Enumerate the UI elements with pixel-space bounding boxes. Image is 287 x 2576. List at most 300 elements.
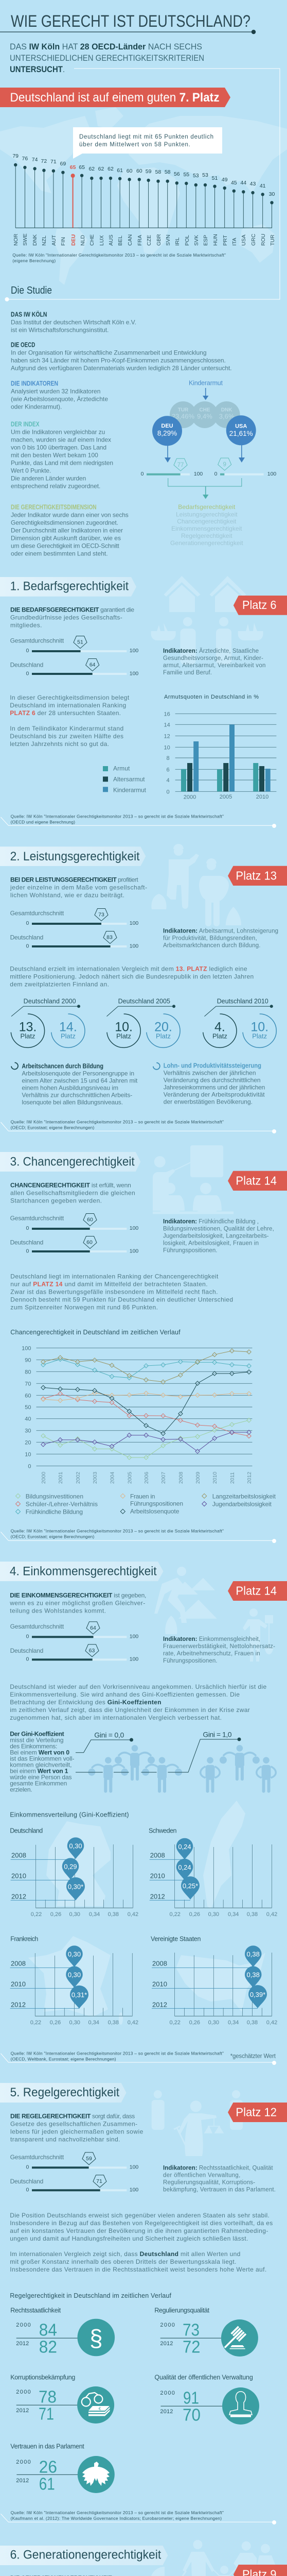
text: Gini explanation: würde eine Person das [9, 1773, 72, 1781]
section heading: 4. Einkommensgerechtigkeit [10, 1564, 157, 1578]
body text [10, 694, 130, 748]
chart: Deutschland: 0,30 [69, 1911, 80, 1918]
body text: Deutschland bis zur zweiten Hälfte des [10, 733, 123, 740]
definition: lichen Wohlstand, wie er dazu beiträgt. [10, 892, 124, 899]
diagram: index method: 8,29% [157, 429, 177, 437]
lollipop chart: overall ranking: 51 [212, 175, 218, 181]
score gauges: Deutschland [10, 934, 43, 941]
stat: Korruptionsbekaempfung [10, 2374, 114, 2424]
stat: Qualitaet der oeffentlichen Verwaltung: 2000 [160, 2390, 175, 2396]
score gauges: 100 [130, 1633, 138, 1639]
indicators: der öffentlichen Verwaltung, [163, 2173, 240, 2179]
chart: Schweden: Schweden [149, 1827, 176, 1834]
indicators: Indikatoren: Rechtsstaatlichkeit, Qualität [163, 2165, 273, 2172]
diagram: index method: Regelgerechtigkeit [181, 532, 232, 539]
body text: Insbesondere in Bezug auf das Bestehen von Regelgerechtigkeit ist dies vorteilhaft, da es [10, 2219, 273, 2227]
text: study description: Dimension gibt Auskunft darüber, wie es [11, 535, 121, 542]
intro text: DAS IW Köln HAT 28 OECD-Länder NACH SECHS [10, 42, 202, 52]
chart: Schweden: 0,38 [247, 1911, 258, 1918]
diagram: index method: TUR [178, 408, 189, 413]
text: study description: Die anderen Länder wurden [11, 475, 86, 482]
stat: Regulierungsqualitaet: 72 [183, 2337, 201, 2357]
text: Gini explanation: ist das Einkommen voll- [10, 1755, 75, 1762]
lollipop chart: overall ranking: 58 [155, 169, 161, 175]
legend: Lohn- und Produktivitaetssteigerung: der erwerbstätigen Bevölkerung. [164, 1098, 253, 1106]
ring chart: rankings 2000: Platz [21, 1032, 35, 1040]
stat: Rechtsstaatlichkeit: 82 [39, 2337, 57, 2357]
text: study description: Gerechtigkeitsdimensionen zugeordnet. [11, 519, 118, 527]
text: study description: DER INDEX [11, 421, 40, 428]
line chart: opportunity indicators: 100 [22, 1345, 31, 1351]
definition: teilung des Wohlstandes kommt. [10, 1607, 106, 1615]
line chart: opportunity indicators: 2006 [144, 1471, 150, 1484]
body text: mittlere Positionierung. Jedoch nähert sich die Bundesrepublik in den letzten Jahren [10, 973, 254, 980]
rank badge [228, 866, 287, 886]
chart: Schweden: 0,25* [183, 1882, 198, 1890]
chart: Schweden: 0,24 [178, 1843, 191, 1851]
section heading [0, 577, 136, 597]
diagram: index method: 0 [141, 471, 144, 477]
line chart legend [15, 1493, 276, 1515]
score gauges: 0 [26, 1656, 29, 1663]
indicators [163, 2165, 276, 2193]
chart: Vereinigte Staaten: 0,26 [189, 2020, 200, 2026]
indicators: bekämpfung, Vertrauen in das Parlament. [163, 2187, 276, 2193]
indicators: Indikatoren: Ärztedichte, Staatliche [163, 648, 259, 654]
indicators [163, 1219, 274, 1254]
body text: Deutschland im internationalen Ranking [10, 702, 126, 709]
icon: gavel [220, 2319, 258, 2357]
definition: DIE REGELGERECHTIGKEIT sorgt dafür, dass [10, 2113, 135, 2120]
line chart: opportunity indicators: 2008 [178, 1471, 184, 1484]
bar chart: poverty rates: 16 [164, 711, 170, 717]
chart: Deutschland: 0,34 [89, 1911, 100, 1918]
diagram: index method: 23,46% [172, 413, 194, 420]
text: study description: Aufgrund des verfügbaren Datenmaterials wurden lediglich 28 Länder untersucht. [11, 365, 232, 372]
indicators: Gesundheitsvorsorge, Armut, Kinder- [163, 655, 263, 662]
diagram: index method: Chancengerechtigkeit [177, 518, 237, 525]
stat: Rechtsstaatlichkeit [10, 2307, 115, 2357]
diagram: Gini 0 figures [76, 1731, 182, 1793]
stat: Regulierungsqualitaet [154, 2307, 258, 2357]
source note [1, 2510, 276, 2524]
section heading [0, 846, 146, 866]
indicators [163, 1636, 275, 1664]
score gauges: 64 [90, 1625, 96, 1631]
score gauges: 0 [26, 920, 29, 926]
chart: Deutschland: 2008 [11, 1852, 26, 1859]
text: Gini explanation: misst die Verteilung [10, 1736, 64, 1743]
banner: overall rank: Deutschland ist auf einem guten 7. Platz [10, 91, 219, 105]
definition: DIE EINKOMMENSGERECHTIGKEIT ist gegeben, [10, 1592, 146, 1599]
text: study description: ist ein Wirtschaftsforschungsinstitut. [11, 327, 109, 334]
icon: paragraph sign [77, 2319, 115, 2356]
icon: handcuffs and money [77, 2386, 114, 2424]
body text: In dieser Gerechtigkeitsdimension belegt [10, 694, 130, 701]
text: study description: oder einem bestimmten Land steht. [11, 550, 108, 557]
definition [10, 606, 134, 629]
section 1: Bedarfsgerechtigkeit [0, 576, 287, 828]
chart: Schweden: 0,34 [228, 1911, 239, 1918]
source note: *geschätzter Wert [230, 2054, 276, 2060]
lollipop chart: overall ranking: 53 [202, 172, 208, 178]
bar chart: poverty rates: Armutsquoten in Deutschland in % [164, 694, 259, 700]
chart: Vereinigte Staaten: 0,22 [169, 2020, 181, 2026]
source note: Quelle: IW Köln "Internationaler Gerechtigkeitsmonitor 2013 – so gerecht ist die Soziale Marktwirtschaft" [11, 1528, 224, 1533]
line chart: opportunity indicators [10, 1329, 276, 1515]
definition: Gesetze des gesellschaftlichen Zusammen- [10, 2121, 137, 2128]
score gauges: 83 [106, 935, 113, 941]
background icon: workers [151, 844, 241, 926]
lollipop chart: overall ranking: 44 [240, 180, 246, 186]
lollipop chart: overall ranking: ITA [231, 238, 238, 246]
lollipop chart: overall ranking: LUX [99, 235, 105, 246]
text: study description: machen, wurden sie auf einem Index [11, 436, 111, 444]
indicators: Führungspositionen. [163, 1248, 217, 1254]
diagram: index method: 77 [177, 462, 184, 468]
body text: Deutschland erzielt im internationalen Vergleich mit dem 13. PLATZ lediglich eine [10, 965, 247, 973]
line chart: opportunity indicators: 0 [28, 1463, 31, 1469]
lollipop chart: overall ranking: FRA [137, 235, 143, 246]
diagram: index method: 21,61% [229, 430, 253, 437]
ring chart: rankings 2005: Platz [156, 1032, 171, 1040]
text: study description: mit den besten Wert bekam 100 [11, 452, 98, 459]
lollipop chart: overall ranking: ROU [260, 234, 266, 246]
definition: BEI DER LEISTUNGSGERECHTIGKEIT profitiert [10, 876, 138, 884]
lollipop chart: overall ranking: 56 [174, 171, 180, 177]
body text [10, 1273, 233, 1311]
source note: Quelle: IW Köln "Internationaler Gerechtigkeitsmonitor 2013 – so gerecht ist die Soziale Marktwirtschaft" [11, 1119, 224, 1124]
ring chart: rankings 2010 [203, 998, 276, 1047]
bar chart: poverty rates: 4 [167, 777, 170, 784]
text: Gini explanation [9, 1730, 75, 1793]
intro text [10, 42, 204, 74]
lollipop chart: overall ranking: 71 [50, 159, 57, 165]
chart: Vereinigte Staaten: 0,30 [208, 2020, 219, 2026]
line chart: opportunity indicators: 2010 [212, 1471, 218, 1484]
intro text: UNTERSCHIEDLICHEN GERECHTIGKEITSKRITERIEN [10, 53, 204, 63]
white frame line [5, 69, 280, 301]
section heading [0, 1152, 140, 1172]
chart: Frankreich: 0,26 [50, 2020, 61, 2026]
text: Gini explanation: des Einkommens: [10, 1742, 57, 1750]
line chart: opportunity indicators: 2011 [229, 1472, 236, 1484]
lollipop chart: overall ranking: CHE [89, 234, 95, 246]
legend: Arbeitschancen: Arbeitslosenquote der Personengruppe in [22, 1070, 134, 1077]
section 3: Chancengerechtigkeit [0, 1145, 287, 1543]
lollipop chart: overall ranking: AUS [108, 234, 114, 246]
line chart: opportunity indicators: 2000 [41, 1471, 47, 1484]
score gauges: 60 [87, 1217, 93, 1223]
bar chart: poverty rates: 2000 [184, 794, 196, 801]
diagram: index method: Leistungsgerechtigkeit [176, 511, 238, 518]
world map background [0, 107, 287, 285]
chart: Frankreich: 0,34 [88, 2020, 99, 2026]
stat: Korruptionsbekaempfung: 2012 [16, 2408, 29, 2414]
line chart: opportunity indicators: 2004 [109, 1471, 115, 1484]
text: Gini explanation: kommen gleichverteilt, [10, 1761, 72, 1768]
line chart legend: Frühkindliche Bildung [26, 1508, 83, 1515]
score gauges: 0 [26, 670, 29, 676]
line chart legend: Führungspositionen [130, 1500, 183, 1507]
ring chart: rankings 2000 [11, 998, 85, 1047]
score gauges: 59 [86, 2156, 92, 2162]
chart legend: Altersarmut [113, 775, 145, 783]
rank badge: Platz 14 [236, 1174, 277, 1187]
bar chart: poverty rates: 14 [164, 722, 170, 728]
score gauges [10, 909, 138, 949]
score gauges: Deutschland [10, 1647, 43, 1654]
chart: Vereinigte Staaten [151, 1935, 277, 2026]
stat: Korruptionsbekaempfung: 71 [39, 2404, 54, 2424]
indicators: Führungspositionen. [163, 1658, 217, 1664]
stat: Regulierungsqualitaet: 2012 [160, 2341, 173, 2347]
chart: Schweden: 0,22 [169, 1911, 181, 1918]
line chart: opportunity indicators: 40 [25, 1416, 31, 1422]
score gauges: 71 [96, 2178, 102, 2184]
legend: Lohn- und Produktivitaetssteigerung: Verhältnis zwischen der jährlichen [164, 1070, 256, 1077]
stat: Korruptionsbekaempfung: 78 [39, 2387, 57, 2406]
chart: Deutschland: 0,29 [64, 1863, 77, 1870]
chart: Vereinigte Staaten: 0,38 [247, 1951, 260, 1958]
body text: Einkommensverteilung. Sie wird anhand des Gini-Koeffizienten gemessen. Die [10, 1691, 240, 1698]
lollipop chart: overall ranking: 72 [41, 158, 47, 164]
lollipop chart: overall ranking: SWE [22, 233, 28, 246]
body text: In dem Teilindikator Kinderarmut stand [10, 725, 123, 732]
line chart: opportunity indicators: 2001 [58, 1471, 64, 1484]
bar chart: poverty rates: 12 [164, 733, 170, 739]
definition: transparent und nachvollziehbar sind. [10, 2136, 120, 2143]
indicators: Indikatoren: Arbeitsarmut, Lohnsteigerung [163, 928, 278, 935]
lollipop chart: overall ranking: 43 [250, 181, 256, 187]
source note [1, 2050, 276, 2065]
definition [10, 1182, 135, 1205]
lollipop chart: overall ranking: SVN [165, 234, 171, 246]
definition: mitgliedes. [10, 621, 42, 629]
score gauges: 0 [26, 1633, 29, 1639]
source note: (OECD, Weltbank, Eurostaat; eigene Berechnungen) [11, 2056, 116, 2061]
line chart legend: Jugendarbeitslosigkeit [212, 1500, 272, 1507]
intro text: UNTERSUCHT. [10, 64, 65, 74]
ring chart: rankings 2000: Deutschland 2000 [24, 998, 76, 1005]
chart: Deutschland: 0,42 [128, 1911, 138, 1918]
line chart: opportunity indicators: 90 [25, 1357, 31, 1363]
source note: Quelle: IW Köln "Internationaler Gerechtigkeitsmonitor 2013 – so gerecht ist die Soziale Marktwirtschaft" [12, 252, 226, 258]
stat: Qualitaet der oeffentlichen Verwaltung: Qualität der öffentlichen Verwaltung [154, 2374, 253, 2381]
legend: Arbeitschancen: einem Alter zwischen 15 und 64 Jahren mit [22, 1077, 138, 1084]
section heading: 6. Generationengerechtigkeit [10, 2548, 162, 2562]
lollipop chart: overall ranking: 79 [12, 153, 19, 159]
score gauges: 100 [130, 1656, 138, 1663]
definition [10, 876, 147, 899]
stat: Vertrauen in das Parlament [10, 2443, 115, 2494]
text: Gini explanation: bei einem Wert von 1 [10, 1767, 68, 1774]
stat: Rechtsstaatlichkeit: Rechtsstaatlichkeit [10, 2307, 61, 2314]
line chart: opportunity indicators: 80 [25, 1369, 31, 1375]
indicators: Frauenerwerbstätigkeit, Nettolohnersatz- [163, 1643, 275, 1650]
text: study description: um diese Gerechtigkeit im OECD-Schnitt [11, 543, 119, 550]
indicators: Arbeitsmarktchancen durch Bildung. [163, 943, 260, 949]
chart: Frankreich [10, 1935, 138, 2026]
body text: dem zweitplatzierten Finnland an. [10, 981, 109, 988]
diagram: index method: 0 [214, 471, 218, 477]
score gauges: 0 [26, 648, 29, 654]
text: study description: oder Kinderarmut). [11, 403, 62, 411]
line chart: opportunity indicators: 2003 [92, 1471, 98, 1484]
diagram: index method: 9,4% [197, 413, 212, 420]
lollipop chart: overall ranking: AUT [51, 234, 57, 246]
title: WIE GERECHT IST DEUTSCHLAND? [11, 12, 250, 30]
indicators: Indikatoren: Einkommensgleichheit, [163, 1636, 260, 1642]
definition: allen Gesellschaftsmitgliedern die gleichen [10, 1190, 135, 1197]
diagram: index method: Bedarfsgerechtigkeit [178, 503, 236, 511]
diagram: Gini 1 figures [76, 1731, 276, 1793]
callout: über dem Mittelwert von 58 Punkten. [79, 142, 190, 148]
score gauges: 100 [130, 1248, 138, 1254]
ring chart: rankings 2000: 13. [19, 1020, 37, 1034]
source note: (OECD; Eurostaat; eigene Berechnungen) [11, 1534, 95, 1539]
section 6: Generationengerechtigkeit [0, 2540, 287, 2576]
definition: Startchancen gegeben werden. [10, 1197, 102, 1205]
score gauges: 100 [130, 2164, 138, 2170]
lollipop chart: overall ranking: 49 [222, 177, 228, 183]
body text: PLATZ 6 der 28 untersuchten Staaten. [10, 709, 121, 717]
source note: Quelle: IW Köln "Internationaler Gerechtigkeitsmonitor 2013 – so gerecht ist die Soziale Marktwirtschaft" [11, 2050, 224, 2056]
body text: nur auf PLATZ 14 und damit im Mittelfeld der betrachteten Staaten. [10, 1281, 208, 1288]
chart: Frankreich: 0,31* [71, 1991, 87, 1999]
bar chart: poverty rates: 10 [164, 744, 170, 751]
ring chart: rankings 2005: 10. [115, 1020, 133, 1034]
chart legend [103, 765, 147, 793]
indicators: armut, Altersarmut, Vereinbarkeit von [163, 663, 265, 669]
chart: Deutschland: 0,26 [50, 1911, 61, 1918]
indicators: Familie und Beruf. [163, 670, 212, 676]
stat: Vertrauen in das Parlament: 2012 [16, 2478, 29, 2484]
body text: zugenommen hat, sich aber im internationalen Vergleich verbessert hat. [10, 1714, 222, 1721]
section heading: 3. Chancengerechtigkeit [10, 1155, 135, 1169]
text: study description: DIE OECD [11, 342, 35, 349]
source note [1, 1528, 276, 1543]
line chart: opportunity indicators: 2012 [246, 1471, 253, 1484]
icon: paragraph sign: § [89, 2325, 103, 2351]
chart heading: rules over time: Regelgerechtigkeit in Deutschland im zeitlichen Verlauf [10, 2292, 172, 2299]
score gauges: 0 [26, 2164, 29, 2170]
chart: Schweden: 0,26 [189, 1911, 200, 1918]
body text: Deutschland ist wieder auf den Vorkrisenniveau angekommen. Ursächlich hierfür ist die [10, 1683, 267, 1690]
ring chart: rankings 2010: 4. [214, 1020, 225, 1034]
text: study description [11, 310, 232, 557]
definition [9, 1592, 146, 1615]
source note: (OECD; Eurostaat; eigene Berechnungen) [11, 1125, 95, 1130]
stat: Rechtsstaatlichkeit: 2012 [16, 2341, 29, 2347]
chart: Vereinigte Staaten: 0,42 [266, 2020, 277, 2026]
section heading: 5. Regelgerechtigkeit [10, 2086, 119, 2099]
diagram: Gini 1 figures: Gini = 1,0 [203, 1731, 232, 1739]
ring chart: rankings 2010: Platz [212, 1032, 227, 1040]
diagram: index method: 3,6% [219, 413, 235, 420]
body text: Die Position Deutschlands erweist sich gegenüber vielen anderen Staaten als sehr stabil. [10, 2212, 270, 2219]
section heading: 2. Leistungsgerechtigkeit [10, 850, 140, 863]
lollipop chart: overall ranking: NOR [13, 233, 19, 246]
indicators: losigkeit, Arbeitslosigkeit, Frauen in [163, 1241, 259, 1247]
lollipop chart: overall ranking: 62 [107, 166, 114, 172]
body text: letzten Jahrzehnts nicht so gut da. [10, 740, 109, 748]
heading: Die Studie: Die Studie [11, 285, 52, 296]
score gauges: 63 [89, 1648, 95, 1654]
chart: Frankreich: 0,30 [68, 1971, 81, 1978]
line chart: opportunity indicators: 50 [25, 1404, 31, 1411]
bar chart: poverty rates: 0 [167, 789, 170, 795]
score gauges [10, 636, 138, 676]
chart: Frankreich: 0,42 [128, 2020, 138, 2026]
chart: Frankreich: 0,38 [108, 2020, 119, 2026]
text: study description: von 0 bis 100 übertragen. Das Land [11, 444, 106, 451]
rank badge: Platz 12 [236, 2106, 277, 2119]
lollipop chart: overall ranking: 53 [193, 173, 199, 179]
body text: Insbesondere das Vertrauen in die Rechtsstaatlichkeit weist besonders hohe Werte auf. [10, 2266, 266, 2273]
background icon: houses, people, baskets [151, 576, 263, 665]
lollipop chart: overall ranking: 58 [165, 169, 171, 175]
lollipop chart: overall ranking: 30 [269, 191, 275, 197]
body text [10, 965, 254, 988]
stat: Vertrauen in das Parlament: Vertrauen in das Parlament [10, 2443, 84, 2450]
text: study description: Der Durchschnitt aller Indikatoren in einer [11, 527, 123, 534]
diagram: index method: 100 [194, 471, 203, 477]
ring chart: rankings 2005: 20. [154, 1020, 172, 1034]
lollipop chart: overall ranking: 60 [127, 168, 133, 174]
text: study description: DIE INDIKATOREN [11, 380, 58, 387]
chart: Frankreich: 0,30 [68, 1951, 81, 1958]
body text: ungen und damit auf Handlungsfreiheiten und Sicherheit zugleich schließen lässt. [10, 2235, 248, 2242]
body text [10, 2212, 273, 2273]
score gauges: 0 [26, 2187, 29, 2193]
section 2: Leistungsgerechtigkeit [0, 844, 287, 1133]
source note [1, 814, 276, 828]
text: study description: Jeder Indikator wurde dann einer von sechs [11, 512, 129, 519]
chart: Deutschland: 2010 [11, 1872, 26, 1880]
indicators: Bildungsinvestitionen, Qualität der Lehre, [163, 1226, 274, 1232]
definition: lebens für jeden gleichermaßen gelten sowie [10, 2128, 144, 2136]
score gauges: 100 [130, 670, 138, 676]
callout [73, 127, 222, 159]
chart: Schweden: 0,42 [266, 1911, 277, 1918]
score gauges: 0 [26, 943, 29, 949]
lollipop chart: overall ranking: 60 [136, 168, 142, 174]
stat: Korruptionsbekaempfung: 2000 [16, 2389, 31, 2395]
chart: Schweden: 0,24 [178, 1863, 191, 1871]
score gauges: 100 [130, 943, 138, 949]
score gauges: 51 [77, 639, 83, 646]
lollipop chart: overall ranking: 65 [70, 164, 76, 171]
text: study description: DAS IW KÖLN [11, 310, 47, 318]
score gauges: Deutschland [10, 2178, 43, 2185]
line chart: opportunity indicators: 2005 [127, 1471, 133, 1484]
chart legend: Kinderarmut [113, 786, 147, 793]
chart: Schweden [149, 1801, 277, 1918]
legend: Lohn- und Produktivitaetssteigerung [153, 1062, 265, 1106]
score gauges: 100 [130, 920, 138, 926]
chart: Vereinigte Staaten: 0,34 [228, 2020, 239, 2026]
lollipop chart: overall ranking [12, 153, 276, 246]
score gauges: Gesamtdurchschnitt [10, 2154, 64, 2161]
diagram: index method: Generationengerechtigkeit [170, 539, 243, 547]
lollipop chart: overall ranking: PRT [222, 235, 228, 246]
lollipop chart: overall ranking: GBR [156, 234, 162, 246]
lollipop chart: overall ranking: 65 [79, 164, 85, 171]
score gauges: 100 [130, 648, 138, 654]
indicators [163, 648, 265, 676]
definition [10, 2113, 144, 2143]
